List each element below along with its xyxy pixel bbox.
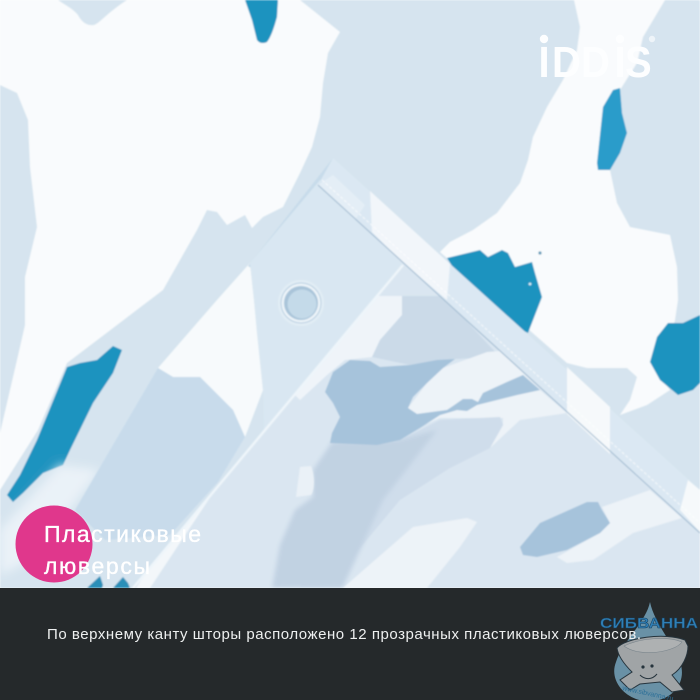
hem stitches (322, 180, 680, 504)
white patch near eyelet (158, 263, 263, 437)
white bump (296, 466, 314, 497)
footer description text: По верхнему канту шторы расположено 12 прозрачных пластиковых люверсов. (47, 626, 641, 643)
dark patch lower right (520, 502, 610, 557)
flap base (120, 180, 700, 588)
blue spot: small at hem (563, 367, 577, 383)
brand name: СИБВАННА (600, 615, 698, 632)
blue spot: above hem (447, 250, 542, 333)
blue spot: far right (650, 315, 700, 395)
white patch at top (290, 296, 402, 400)
dark grey patch (272, 430, 437, 588)
panel: translucent flap below seam (136, 296, 682, 588)
white fold bands (405, 351, 567, 448)
blue shaded patch below eyelet (75, 368, 245, 540)
grey patch at top (372, 296, 500, 365)
flap edge shade (248, 164, 329, 268)
blue spot: left (7, 346, 122, 502)
highlight strip lower left (0, 465, 100, 575)
hem lower shadow line (318, 185, 700, 533)
blue spot: top centre (245, 0, 278, 43)
heading: plastic eyelets: люверсы (44, 553, 150, 579)
white fold lower right (557, 490, 682, 563)
water drop (614, 602, 682, 700)
blue spot: below logo (597, 88, 627, 170)
logo: IDDIS: IDDIS (538, 37, 652, 86)
white camouflage area left (0, 0, 340, 490)
heading: plastic eyelets: Пластиковые (44, 521, 201, 547)
seam (133, 265, 403, 588)
white strip along seam (136, 504, 206, 588)
bathtub face (640, 664, 657, 679)
watermark: Sibvanna logo (600, 602, 698, 700)
panel: dark footer bar (0, 588, 700, 700)
icon: plastic eyelet (281, 284, 320, 322)
white camouflage area right (440, 0, 678, 415)
hem strip (321, 159, 568, 377)
white hem segments (370, 191, 450, 300)
white patch bottom (343, 518, 477, 588)
bathtub inner rim (624, 639, 682, 653)
upper flap strip with eyelet (250, 182, 322, 274)
splash dots (538, 251, 542, 255)
dark patch centre (325, 359, 540, 445)
bathtub (617, 636, 688, 692)
blue spots: bottom (87, 576, 130, 588)
mid grey patch (368, 416, 502, 535)
badge: pink circle (16, 506, 92, 582)
